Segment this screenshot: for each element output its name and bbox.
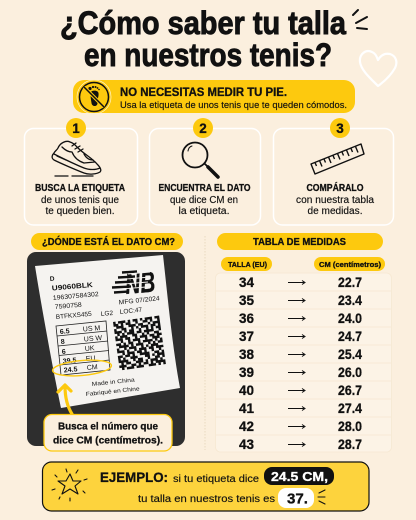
photo of shoe label xyxy=(27,252,185,446)
callout xyxy=(44,414,172,451)
notice pill xyxy=(73,80,355,114)
table rows: 36 xyxy=(239,310,254,326)
step 1 text: BUSCA LA ETIQUETA xyxy=(35,183,125,194)
brand logo: NB xyxy=(124,266,156,301)
panel: example xyxy=(42,462,369,511)
table rows: 42 xyxy=(239,418,254,434)
title: ¿Cómo saber tu talla xyxy=(60,5,346,41)
table rows: 40 xyxy=(239,382,254,398)
label origin text: Fabriqué en Chine xyxy=(86,386,140,398)
step 1 text xyxy=(35,183,125,217)
callout: dice CM (centímetros). xyxy=(53,434,163,446)
size table on label: EU xyxy=(86,355,96,363)
size table on label: 6 xyxy=(62,349,66,356)
size table on label: 6.5 xyxy=(60,328,70,336)
table rows: 25.4 xyxy=(338,346,362,362)
step 3 badge: 3 xyxy=(336,121,344,136)
title xyxy=(60,5,346,73)
column header: cm: CM (centímetros) xyxy=(319,260,381,269)
heading pill: where xyxy=(31,233,183,250)
photo of shoe label: MFG 07/2024 xyxy=(119,295,160,306)
icon: ruler xyxy=(311,144,364,174)
table rows: 28.7 xyxy=(338,436,362,452)
icon: running shoe xyxy=(52,141,101,176)
panel: step 1 xyxy=(24,118,138,225)
column header: size xyxy=(221,257,272,271)
example line 2: 37. xyxy=(287,490,308,508)
photo of shoe label: LG2 xyxy=(101,310,114,318)
step 2 badge: 2 xyxy=(199,121,207,136)
icon: sparkle lines xyxy=(353,10,367,29)
example line 2: tu talla en nuestros tenis es xyxy=(138,494,275,505)
arrow: to highlighted value xyxy=(58,385,72,414)
photo of shoe label: 196307584302 xyxy=(53,291,99,302)
photo of shoe label: LOC:47 xyxy=(119,307,143,316)
size table on label: CM xyxy=(87,364,98,372)
step 2 text: que dice CM en xyxy=(170,195,238,206)
table rows: 24.7 xyxy=(338,328,362,344)
step 3 text: COMPÁRALO xyxy=(306,181,364,194)
table rows: 35 xyxy=(239,292,254,308)
step 3 text: de medidas. xyxy=(308,206,362,217)
title: en nuestros tenis? xyxy=(84,37,332,73)
table rows: 28.0 xyxy=(338,418,362,434)
table rows: 24.0 xyxy=(338,310,362,326)
heading pill: table xyxy=(217,233,383,250)
heading pill: table: TABLA DE MEDIDAS xyxy=(253,237,346,248)
size table on label: US W xyxy=(84,335,103,343)
panel: step 3 xyxy=(274,118,394,225)
label origin text xyxy=(86,377,140,398)
step 2 text: ENCUENTRA EL DATO xyxy=(158,183,251,194)
photo of shoe label: BTFKXS455 xyxy=(56,311,92,321)
table rows: 41 xyxy=(239,400,254,416)
icon: star with rays xyxy=(52,469,87,501)
size table on label: 8 xyxy=(61,339,65,346)
size table on label: UK xyxy=(85,345,95,353)
table rows: 38 xyxy=(239,346,254,362)
table rows: 43 xyxy=(239,436,254,452)
row arrows xyxy=(288,280,305,446)
photo of shoe label: U9060BLK xyxy=(52,282,93,292)
icon: small sparkle xyxy=(318,490,325,504)
size table on label: 39.5 xyxy=(63,357,77,365)
icon: magnifying glass xyxy=(182,142,218,177)
step 2 text: la etiqueta. xyxy=(178,206,230,217)
heading pill: where: ¿DÓNDE ESTÁ EL DATO CM? xyxy=(42,235,175,248)
table rows: 34 xyxy=(239,274,254,290)
table rows: 26.7 xyxy=(338,382,362,398)
panel: where is the CM value xyxy=(27,233,185,451)
column header: size: TALLA (EU) xyxy=(228,260,267,269)
photo of shoe label: 7590758 xyxy=(55,302,82,311)
brand logo xyxy=(112,266,156,301)
icon: heart xyxy=(360,51,396,86)
panel: size table xyxy=(216,233,392,452)
example line 1 xyxy=(100,467,334,485)
size table on label xyxy=(56,321,110,375)
callout: Busca el número que xyxy=(58,420,158,432)
label origin text: Made in China xyxy=(92,377,136,388)
highlight oval xyxy=(52,358,112,378)
notice heading: NO NECESITAS MEDIR TU PIE. xyxy=(120,87,287,99)
notice text: Usa la etiqueta de unos tenis que te queden cómodos. xyxy=(120,100,347,111)
table rows: 39 xyxy=(239,364,254,380)
photo of shoe label: D xyxy=(50,276,55,283)
step 1 badge: 1 xyxy=(72,121,80,136)
table rows: 23.4 xyxy=(338,292,362,308)
table rows: 37 xyxy=(239,328,254,344)
column header: cm xyxy=(314,257,385,271)
table rows: 27.4 xyxy=(338,400,362,416)
example line 1: 24.5 CM, xyxy=(271,469,328,484)
step 3 text: con nuestra tabla xyxy=(296,195,374,206)
size table on label: 24.5 xyxy=(64,366,78,374)
icon: crossed-out foot xyxy=(77,80,111,114)
panel: step 2 xyxy=(150,118,260,225)
step 1 text: de unos tenis que xyxy=(41,195,119,206)
example line 1: EJEMPLO: xyxy=(100,469,168,485)
QR code xyxy=(113,316,166,371)
table rows xyxy=(216,273,392,452)
step 2 text xyxy=(158,183,251,217)
table rows: 22.7 xyxy=(338,274,362,290)
step 1 text: te queden bien. xyxy=(46,206,114,217)
table rows: 26.0 xyxy=(338,364,362,380)
size table on label: US M xyxy=(83,325,101,333)
example line 2 xyxy=(138,488,314,508)
example line 1: si tu etiqueta dice xyxy=(173,474,259,485)
step 3 text xyxy=(296,181,374,217)
